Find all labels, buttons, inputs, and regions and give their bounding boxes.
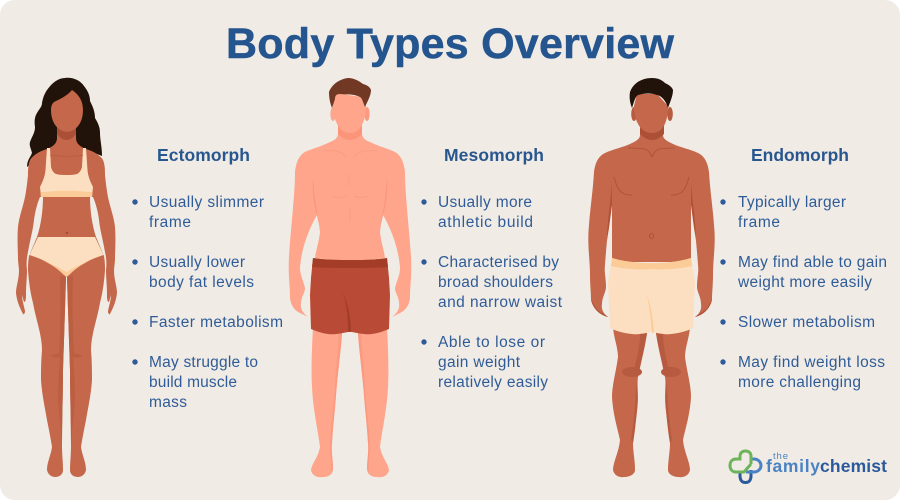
shorts half — [310, 258, 350, 334]
shorts fold — [647, 295, 654, 333]
leg — [311, 328, 342, 477]
bullet list: ectomorph: Usually slimmer — [149, 194, 264, 211]
bullet list: endomorph: May find able to gain — [738, 254, 887, 271]
collar lines — [50, 155, 83, 157]
heading: ectomorph: Ectomorph — [157, 145, 250, 165]
armpit shade — [313, 178, 320, 232]
underwear — [30, 237, 66, 277]
bullet list: ectomorph: May struggle to — [149, 354, 258, 371]
neck shadow — [338, 126, 362, 140]
figure: mesomorph man — [289, 78, 411, 477]
icon: cross of hearts — [730, 451, 761, 482]
bullet list: endomorph: weight more easily — [737, 274, 872, 291]
shorts fold — [343, 293, 351, 332]
navel — [650, 234, 654, 238]
bullet list: endomorph: Slower metabolism — [738, 314, 875, 331]
leg — [612, 328, 647, 477]
ears — [330, 107, 336, 121]
bullet list: endomorph: frame — [738, 214, 780, 231]
bullet list: mesomorph: Usually more — [438, 194, 532, 211]
hair back — [27, 78, 102, 167]
bullet list: mesomorph: gain weight — [438, 354, 521, 371]
bullet list: mesomorph: broad shoulders — [438, 274, 553, 291]
heading: endomorph: Endomorph — [751, 145, 849, 165]
neck shadow — [57, 126, 76, 140]
ears — [631, 107, 637, 121]
figure: endomorph man — [588, 78, 715, 477]
arm shade — [607, 183, 612, 240]
bullet list: ectomorph: Faster metabolism — [149, 314, 283, 331]
hair — [329, 78, 371, 108]
bullet list: mesomorph: and narrow waist — [438, 294, 563, 311]
face — [333, 93, 366, 133]
panel: endomorph text — [720, 145, 887, 391]
figure: ectomorph woman — [16, 78, 117, 477]
wordmark chemist: chemist — [820, 456, 887, 476]
logo: the family chemist — [730, 451, 887, 482]
heading: mesomorph: Mesomorph — [444, 145, 544, 165]
chest lines — [322, 151, 378, 222]
face — [51, 90, 83, 132]
wordmark small: the — [773, 451, 788, 462]
panel: ectomorph text — [132, 145, 283, 411]
bra — [40, 148, 66, 197]
bullet list: ectomorph: mass — [149, 394, 187, 411]
bullet list: ectomorph — [132, 194, 283, 411]
navel — [66, 232, 68, 234]
hand shade — [591, 300, 608, 317]
hair — [630, 78, 673, 108]
wordmark family: family — [766, 456, 820, 476]
bullet list: ectomorph: build muscle — [149, 374, 237, 391]
chest lines — [614, 148, 689, 195]
bullet list: endomorph — [720, 194, 887, 391]
bullet list: ectomorph: Usually lower — [149, 254, 245, 271]
bullet list: mesomorph: relatively easily — [438, 374, 548, 391]
bullet list: endomorph: more challenging — [738, 374, 861, 391]
shorts half — [608, 258, 652, 334]
bullet list: mesomorph: Characterised by — [438, 254, 559, 271]
bullet list: mesomorph: Able to lose or — [438, 334, 545, 351]
bullet list: endomorph: Typically larger — [738, 194, 846, 211]
bullet list: mesomorph — [421, 194, 563, 391]
bullet list: ectomorph: frame — [149, 214, 191, 231]
leg shading — [50, 275, 66, 445]
bullet list: mesomorph: athletic build — [438, 214, 533, 231]
face — [634, 94, 668, 133]
title: Body Types Overview — [226, 20, 675, 68]
neck shadow — [640, 126, 664, 140]
panel: mesomorph text — [421, 145, 563, 391]
bullet list: ectomorph: body fat levels — [149, 274, 254, 291]
bullet list: endomorph: May find weight loss — [738, 354, 885, 371]
